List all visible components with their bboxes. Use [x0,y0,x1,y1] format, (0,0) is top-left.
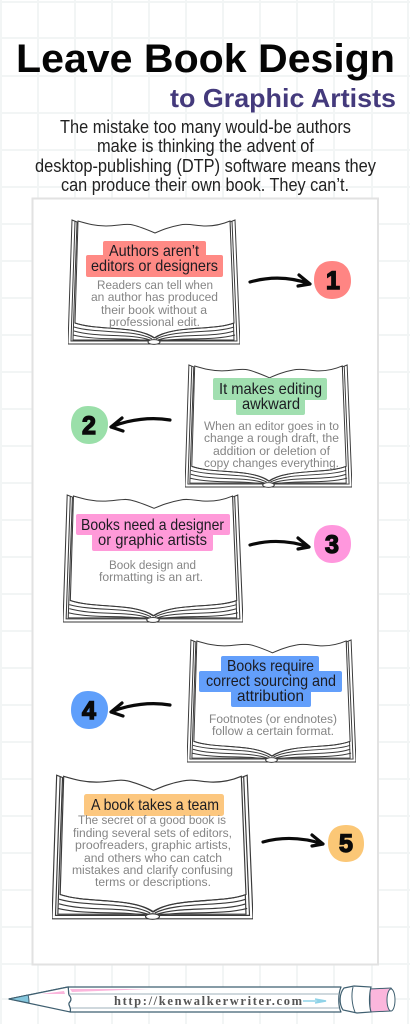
body text 2: addition or deletion of [213,444,331,458]
pencil body [9,987,341,1012]
body text 2: When an editor goes in to [204,419,339,433]
body text 2: copy changes everything. [204,456,339,470]
heading highlight 2 [213,378,327,415]
pencil highlights [41,989,150,994]
heading 3 [81,517,225,549]
panel: item 2 [71,365,352,487]
title: Leave Book Design [16,37,395,81]
heading 2 [219,381,322,413]
body text 4: Footnotes (or endnotes) [209,712,337,726]
heading 4: correct sourcing and [206,673,336,690]
body text 1: their book without a [101,303,207,317]
body text 1: an author has produced [91,290,218,304]
icon: open book 4 [187,640,356,762]
heading highlight 4 [199,656,342,707]
body text 5 [72,813,233,889]
heading 4: attribution [237,688,304,705]
number badge 5: 5 [339,830,353,858]
body text 4: follow a certain format. [212,724,334,738]
number badge 1: 1 [326,267,340,295]
body text 3 [99,558,203,584]
heading 1: editors or designers [91,258,218,275]
number badge 2 [71,406,108,444]
body text 5: terms or descriptions. [95,875,211,889]
body text 1: professional edit. [109,315,200,329]
panel: item 4 [71,640,356,762]
body text 2 [204,419,339,470]
body text 5: finding several sets of editors, [73,826,232,840]
arrow 1 [250,275,310,286]
body text 1: Readers can tell when [97,278,213,292]
heading highlight 5 [84,794,224,816]
intro text: can produce their own book. They can’t. [61,174,349,195]
number badge 5 [328,825,364,862]
intro text: make is thinking the advent of [97,135,315,156]
body text 1 [91,278,218,329]
heading 3: or graphic artists [98,532,207,549]
body text 5: proofreaders, graphic artists, [75,838,231,852]
heading 4: Books require [227,658,314,675]
panel: item 3 [63,495,351,622]
intro text [35,116,377,195]
eraser cap [387,989,395,1011]
eraser [370,988,394,1012]
heading 5: A book takes a team [91,797,219,814]
number badge 3 [314,525,351,563]
icon: open book 5 [52,775,253,919]
body text 5: and others who can catch [84,851,222,865]
intro text: The mistake too many would-be authors [60,116,351,137]
subtitle: to Graphic Artists [170,83,396,113]
body text 2: change a rough draft, the [204,431,339,445]
heading highlight 1 [86,241,223,277]
heading 2: It makes editing [219,381,322,398]
icon: open book 1 [68,220,240,344]
heading 4 [206,658,336,705]
icon: open book 3 [63,495,243,622]
arrow 2 [111,418,170,431]
number badge 4 [71,691,108,729]
heading 2: awkward [242,396,300,413]
arrow 4 [111,703,170,716]
website url: http://kenwalkerwriter.com [114,994,303,1008]
heading 1 [91,243,218,275]
heading 1: Authors aren’t [109,243,200,260]
arrow 5 [263,835,323,846]
body text 3: Book design and [109,558,196,572]
icon: open book 2 [185,365,352,487]
ferrule [340,986,371,1013]
panel: white content card [32,198,378,964]
body text 5: The secret of a good book is [78,813,226,827]
number badge 4: 4 [82,697,96,725]
pencil tip [9,995,29,1003]
number badge 1 [314,261,351,299]
intro text: desktop-publishing (DTP) software means they [35,155,377,176]
body text 3: formatting is an art. [99,570,203,584]
body text 4 [209,712,337,738]
body text 5: mistakes and clarify confusing [72,863,233,877]
panel: item 5 [52,775,364,919]
number badge 2: 2 [82,412,96,440]
heading 3: Books need a designer [81,517,225,534]
panel: item 1 [68,220,351,344]
heading highlight 3 [76,514,230,551]
arrow 3 [250,538,309,549]
number badge 3: 3 [325,531,339,559]
pencil footer [9,986,395,1013]
